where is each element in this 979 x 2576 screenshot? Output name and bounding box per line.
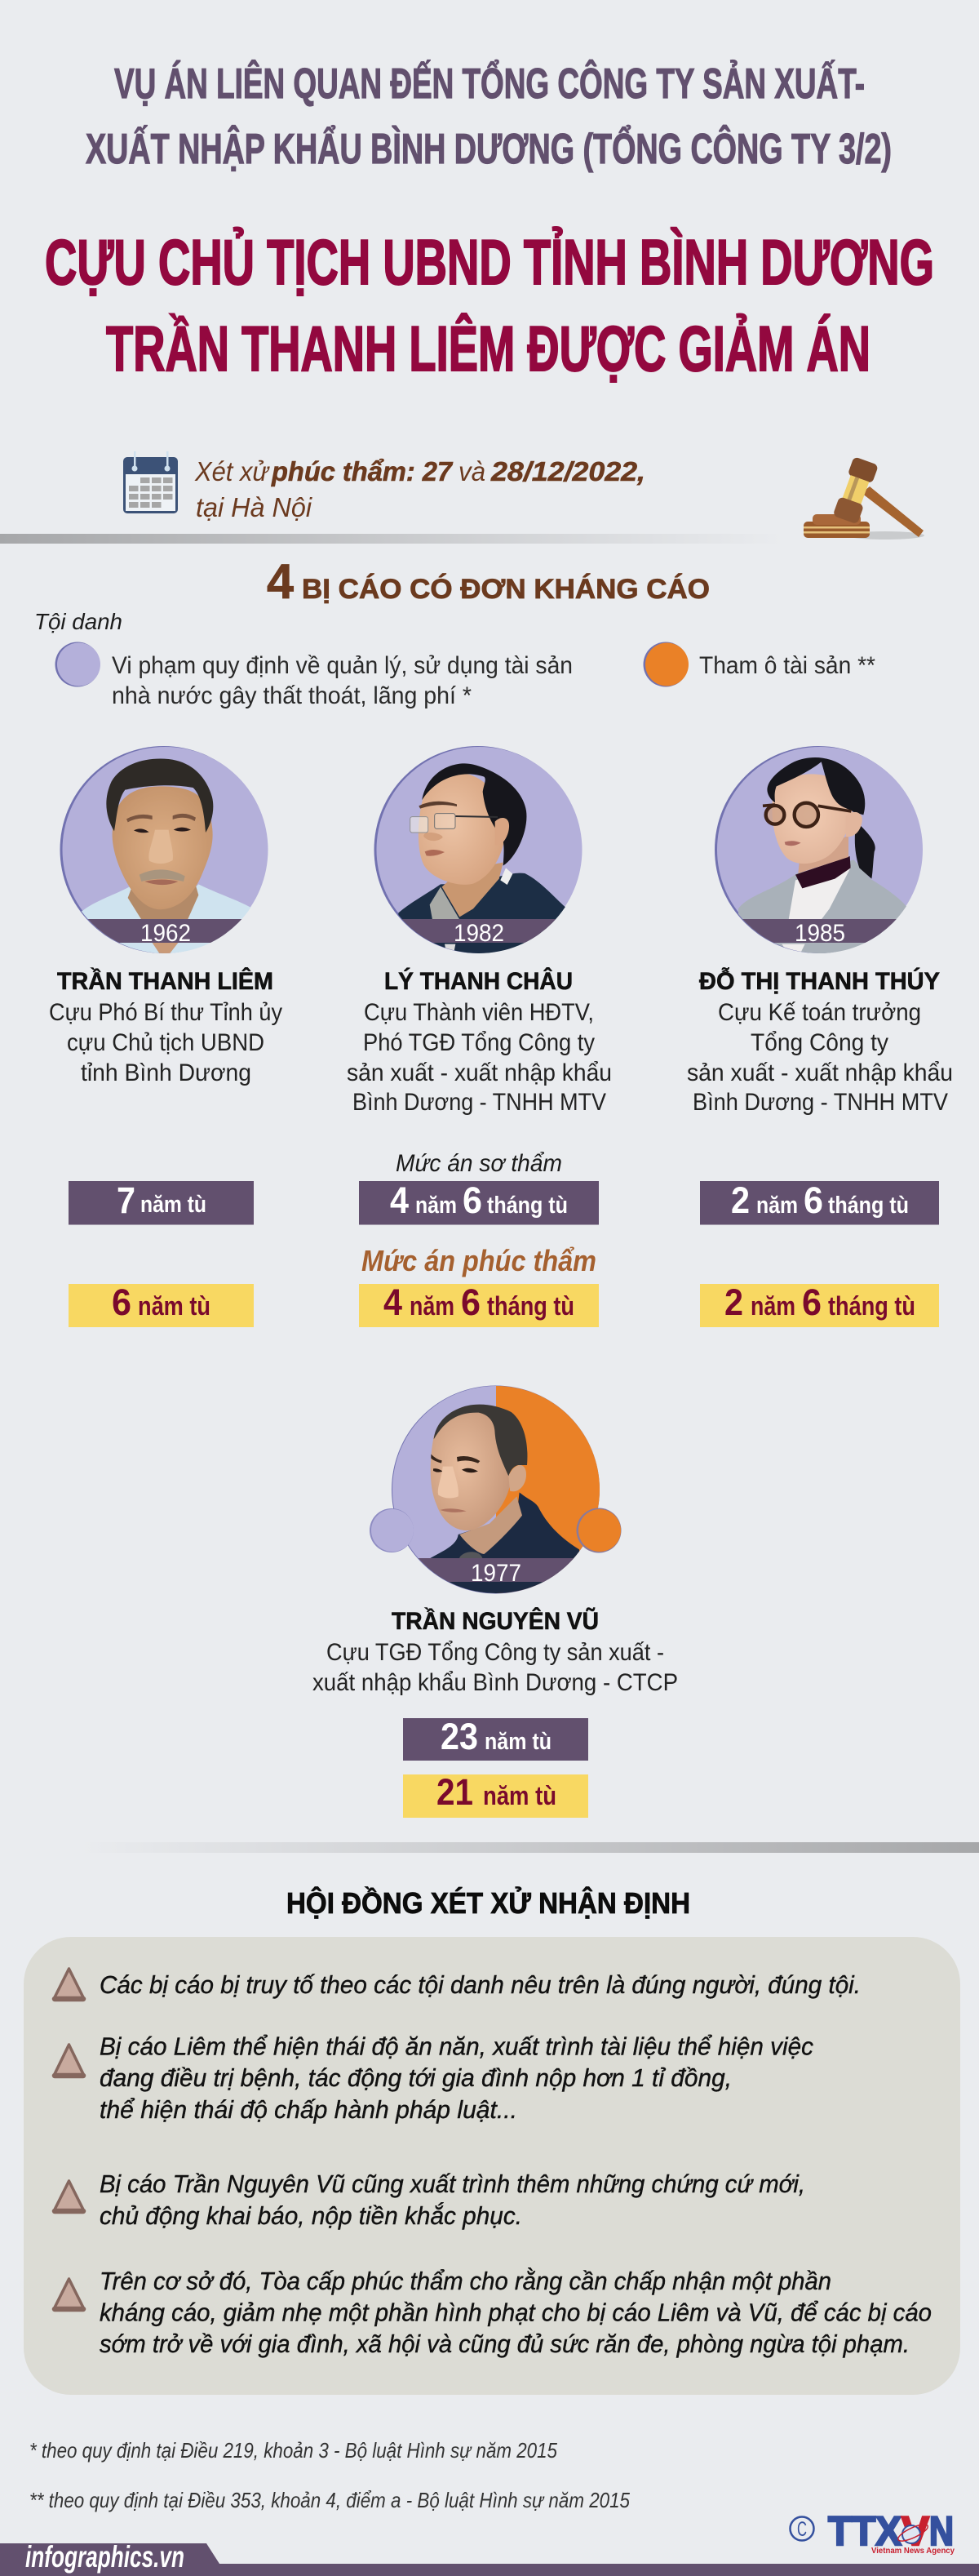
footer band: infographics.vn bbox=[25, 2540, 184, 2574]
heading: four defendants: 4 bbox=[267, 554, 295, 609]
point 2 bbox=[54, 2032, 813, 2124]
footnotes: ** theo quy định tại Điều 353, khoản 4, điểm a - Bộ luật Hình sự năm 2015 bbox=[29, 2488, 630, 2512]
heading: four defendants bbox=[267, 554, 710, 609]
logo: TTXVN: N bbox=[929, 2508, 954, 2554]
trial date text: phúc thẩm: 27 bbox=[271, 456, 454, 486]
point 3: Bị cáo Trần Nguyên Vũ cũng xuất trình thêm những chứng cứ mới, bbox=[100, 2170, 805, 2198]
name and role: Lý Thanh Châu: sản xuất - xuất nhập khẩu bbox=[347, 1059, 612, 1086]
sentence bar: Vũ appeal: 21 bbox=[436, 1771, 473, 1813]
sentence bar: Thúy appeal: 2 bbox=[724, 1281, 743, 1323]
sentence bar: Liêm appeal: 6 bbox=[112, 1281, 131, 1323]
portrait: Đỗ Thị Thanh Thúy bbox=[715, 746, 924, 961]
sentence bar: Vũ appeal: năm tù bbox=[483, 1781, 556, 1810]
legend text: purple: Vi phạm quy định về quản lý, sử dụng tài sản bbox=[112, 652, 573, 679]
icon: gavel bbox=[804, 456, 924, 540]
main title bbox=[45, 226, 934, 384]
name and role: Trần Thanh Liêm bbox=[49, 967, 282, 1086]
sentence bar: Liêm appeal bbox=[69, 1281, 254, 1327]
sentence bar: Thúy first instance: năm bbox=[756, 1193, 798, 1219]
point 4 bbox=[54, 2267, 932, 2358]
point 4: Trên cơ sở đó, Tòa cấp phúc thẩm cho rằng cần chấp nhận một phần bbox=[100, 2267, 831, 2295]
icon: calendar bbox=[123, 451, 178, 513]
title: case context bbox=[86, 60, 892, 173]
sentence bar: Thúy appeal: tháng tù bbox=[828, 1291, 915, 1321]
label: first instance sentence: Mức án sơ thẩm bbox=[396, 1150, 562, 1177]
sentence bar: Thúy appeal bbox=[700, 1281, 939, 1327]
sentence bar: Vũ first instance: 23 bbox=[441, 1716, 478, 1757]
trial date text: tại Hà Nội bbox=[196, 492, 313, 522]
point 2: thể hiện thái độ chấp hành pháp luật... bbox=[100, 2095, 517, 2124]
portrait: Trần Thanh Liêm: 1962 bbox=[140, 920, 191, 947]
legend text: orange: Tham ô tài sản ** bbox=[699, 652, 875, 679]
sentence bar: Liêm first instance: năm tù bbox=[140, 1192, 206, 1218]
sentence bar: Châu appeal: tháng tù bbox=[487, 1291, 574, 1321]
name and role: Trần Nguyên Vũ bbox=[312, 1607, 678, 1696]
portrait: Trần Nguyên Vũ bbox=[370, 1386, 622, 1597]
legend text: purple: nhà nước gây thất thoát, lãng phí * bbox=[112, 682, 472, 709]
footnotes: * theo quy định tại Điều 219, khoản 3 - Bộ luật Hình sự năm 2015 bbox=[29, 2438, 557, 2463]
name and role: Lý Thanh Châu bbox=[347, 967, 612, 1116]
sentence bar: Châu appeal: 6 bbox=[461, 1281, 481, 1323]
sentence bar: Vũ first instance: năm tù bbox=[485, 1729, 552, 1755]
point 2: Bị cáo Liêm thể hiện thái độ ăn năn, xuất trình tài liệu thể hiện việc bbox=[100, 2032, 813, 2060]
legend text: purple bbox=[112, 652, 573, 709]
name and role: Đỗ Thị Thanh Thúy: Bình Dương - TNHH MTV bbox=[693, 1089, 948, 1116]
sentence bar: Châu first instance: tháng tù bbox=[487, 1193, 568, 1219]
heading: four defendants: BỊ CÁO CÓ ĐƠN KHÁNG CÁO bbox=[302, 574, 710, 605]
point 4: kháng cáo, giảm nhẹ một phần hình phạt cho bị cáo Liêm và Vũ, để các bị cáo bbox=[100, 2298, 932, 2326]
label: appeal sentence: Mức án phúc thẩm bbox=[361, 1244, 596, 1277]
sentence bar: Thúy appeal: 6 bbox=[802, 1281, 822, 1323]
sentence bar: Thúy first instance: 2 bbox=[731, 1179, 750, 1221]
portrait: Trần Thanh Liêm bbox=[60, 746, 268, 961]
sentence bar: Châu first instance: 6 bbox=[463, 1179, 482, 1221]
legend: charges bbox=[34, 609, 875, 709]
divider bar left bbox=[0, 534, 783, 544]
legend: charges: Tội danh bbox=[34, 609, 122, 634]
sentence bar: Thúy first instance: 6 bbox=[804, 1179, 823, 1221]
name and role: Trần Thanh Liêm: TRẦN THANH LIÊM bbox=[57, 967, 273, 995]
portrait: Đỗ Thị Thanh Thúy: 1985 bbox=[795, 920, 845, 947]
name and role: Lý Thanh Châu: Cựu Thành viên HĐTV, bbox=[364, 999, 594, 1026]
sentence bar: Liêm first instance bbox=[69, 1179, 254, 1224]
trial date text: Xét xử bbox=[194, 456, 270, 486]
name and role: Đỗ Thị Thanh Thúy: Tổng Công ty bbox=[751, 1029, 888, 1056]
logo: TTXVN bbox=[790, 2508, 955, 2556]
logo: TTXVN: V bbox=[901, 2508, 930, 2554]
legend icon: orange bbox=[643, 642, 689, 687]
name and role: Đỗ Thị Thanh Thúy bbox=[687, 967, 953, 1116]
portrait: Lý Thanh Châu: 1982 bbox=[454, 920, 504, 947]
trial date text bbox=[194, 456, 645, 522]
sentence bar: Châu appeal bbox=[359, 1281, 599, 1327]
name and role: Lý Thanh Châu: LÝ THANH CHÂU bbox=[384, 967, 573, 995]
name and role: Trần Thanh Liêm: Cựu Phó Bí thư Tỉnh ủy bbox=[49, 999, 282, 1026]
logo: TTXVN: TTX bbox=[828, 2508, 901, 2554]
heading: court assessment: HỘI ĐỒNG XÉT XỬ NHẬN ĐỊNH bbox=[286, 1885, 690, 1920]
trial date text: 28/12/2022, bbox=[490, 456, 645, 486]
point 2: đang điều trị bệnh, tác động tới gia đình nộp hơn 1 tỉ đồng, bbox=[100, 2063, 732, 2092]
small circle: purple charge bbox=[370, 1508, 414, 1552]
sentence bar: Thúy first instance: tháng tù bbox=[828, 1193, 909, 1219]
sentence bar: Châu first instance bbox=[359, 1179, 599, 1224]
point 3: chủ động khai báo, nộp tiền khắc phục. bbox=[100, 2201, 522, 2230]
sentence bar: Châu first instance: năm bbox=[415, 1193, 457, 1219]
sentence bar: Vũ first instance bbox=[403, 1716, 588, 1761]
point 3 bbox=[54, 2170, 805, 2230]
sentence bar: Châu appeal: 4 bbox=[383, 1281, 402, 1323]
footnotes bbox=[29, 2438, 630, 2512]
sentence bar: Thúy first instance bbox=[700, 1179, 939, 1224]
trial date text: và bbox=[458, 456, 485, 486]
sentence bar: Liêm first instance: 7 bbox=[117, 1179, 135, 1221]
sentence bar: Châu appeal: năm bbox=[410, 1291, 454, 1321]
name and role: Lý Thanh Châu: Phó TGĐ Tổng Công ty bbox=[363, 1029, 595, 1056]
legend icon: purple bbox=[55, 642, 100, 687]
panel: court assessment bbox=[24, 1937, 960, 2395]
sentence bar: Vũ appeal bbox=[403, 1771, 588, 1818]
sentence bar: Thúy appeal: năm bbox=[751, 1291, 795, 1321]
name and role: Đỗ Thị Thanh Thúy: Cựu Kế toán trưởng bbox=[718, 999, 921, 1026]
name and role: Trần Thanh Liêm: cựu Chủ tịch UBND bbox=[67, 1029, 264, 1056]
sentence bar: Liêm appeal: năm tù bbox=[138, 1291, 210, 1321]
sentence bar: Châu first instance: 4 bbox=[390, 1179, 409, 1221]
portrait: Lý Thanh Châu bbox=[374, 746, 583, 961]
logo: TTXVN: Vietnam News Agency bbox=[871, 2547, 955, 2556]
name and role: Trần Thanh Liêm: tỉnh Bình Dương bbox=[81, 1059, 251, 1086]
point 1: Các bị cáo bị truy tố theo các tội danh nêu trên là đúng người, đúng tội. bbox=[100, 1970, 861, 1999]
divider bar right bbox=[82, 1842, 979, 1853]
logo: TTXVN: C bbox=[797, 2518, 807, 2541]
footer band bbox=[0, 2540, 979, 2576]
small circle: orange charge bbox=[576, 1508, 622, 1552]
name and role: Lý Thanh Châu: Bình Dương - TNHH MTV bbox=[352, 1089, 606, 1116]
name and role: Trần Nguyên Vũ: xuất nhập khẩu Bình Dương - CTCP bbox=[312, 1669, 678, 1696]
name and role: Đỗ Thị Thanh Thúy: sản xuất - xuất nhập khẩu bbox=[687, 1059, 953, 1086]
point 4: sớm trở về với gia đình, xã hội và cũng đủ sức răn đe, phòng ngừa tội phạm. bbox=[100, 2330, 910, 2358]
name and role: Trần Nguyên Vũ: Cựu TGĐ Tổng Công ty sản xuất - bbox=[326, 1639, 664, 1666]
name and role: Đỗ Thị Thanh Thúy: ĐỖ THỊ THANH THÚY bbox=[699, 967, 940, 995]
portrait: Trần Nguyên Vũ: 1977 bbox=[471, 1560, 521, 1587]
name and role: Trần Nguyên Vũ: TRẦN NGUYÊN VŨ bbox=[392, 1607, 599, 1635]
